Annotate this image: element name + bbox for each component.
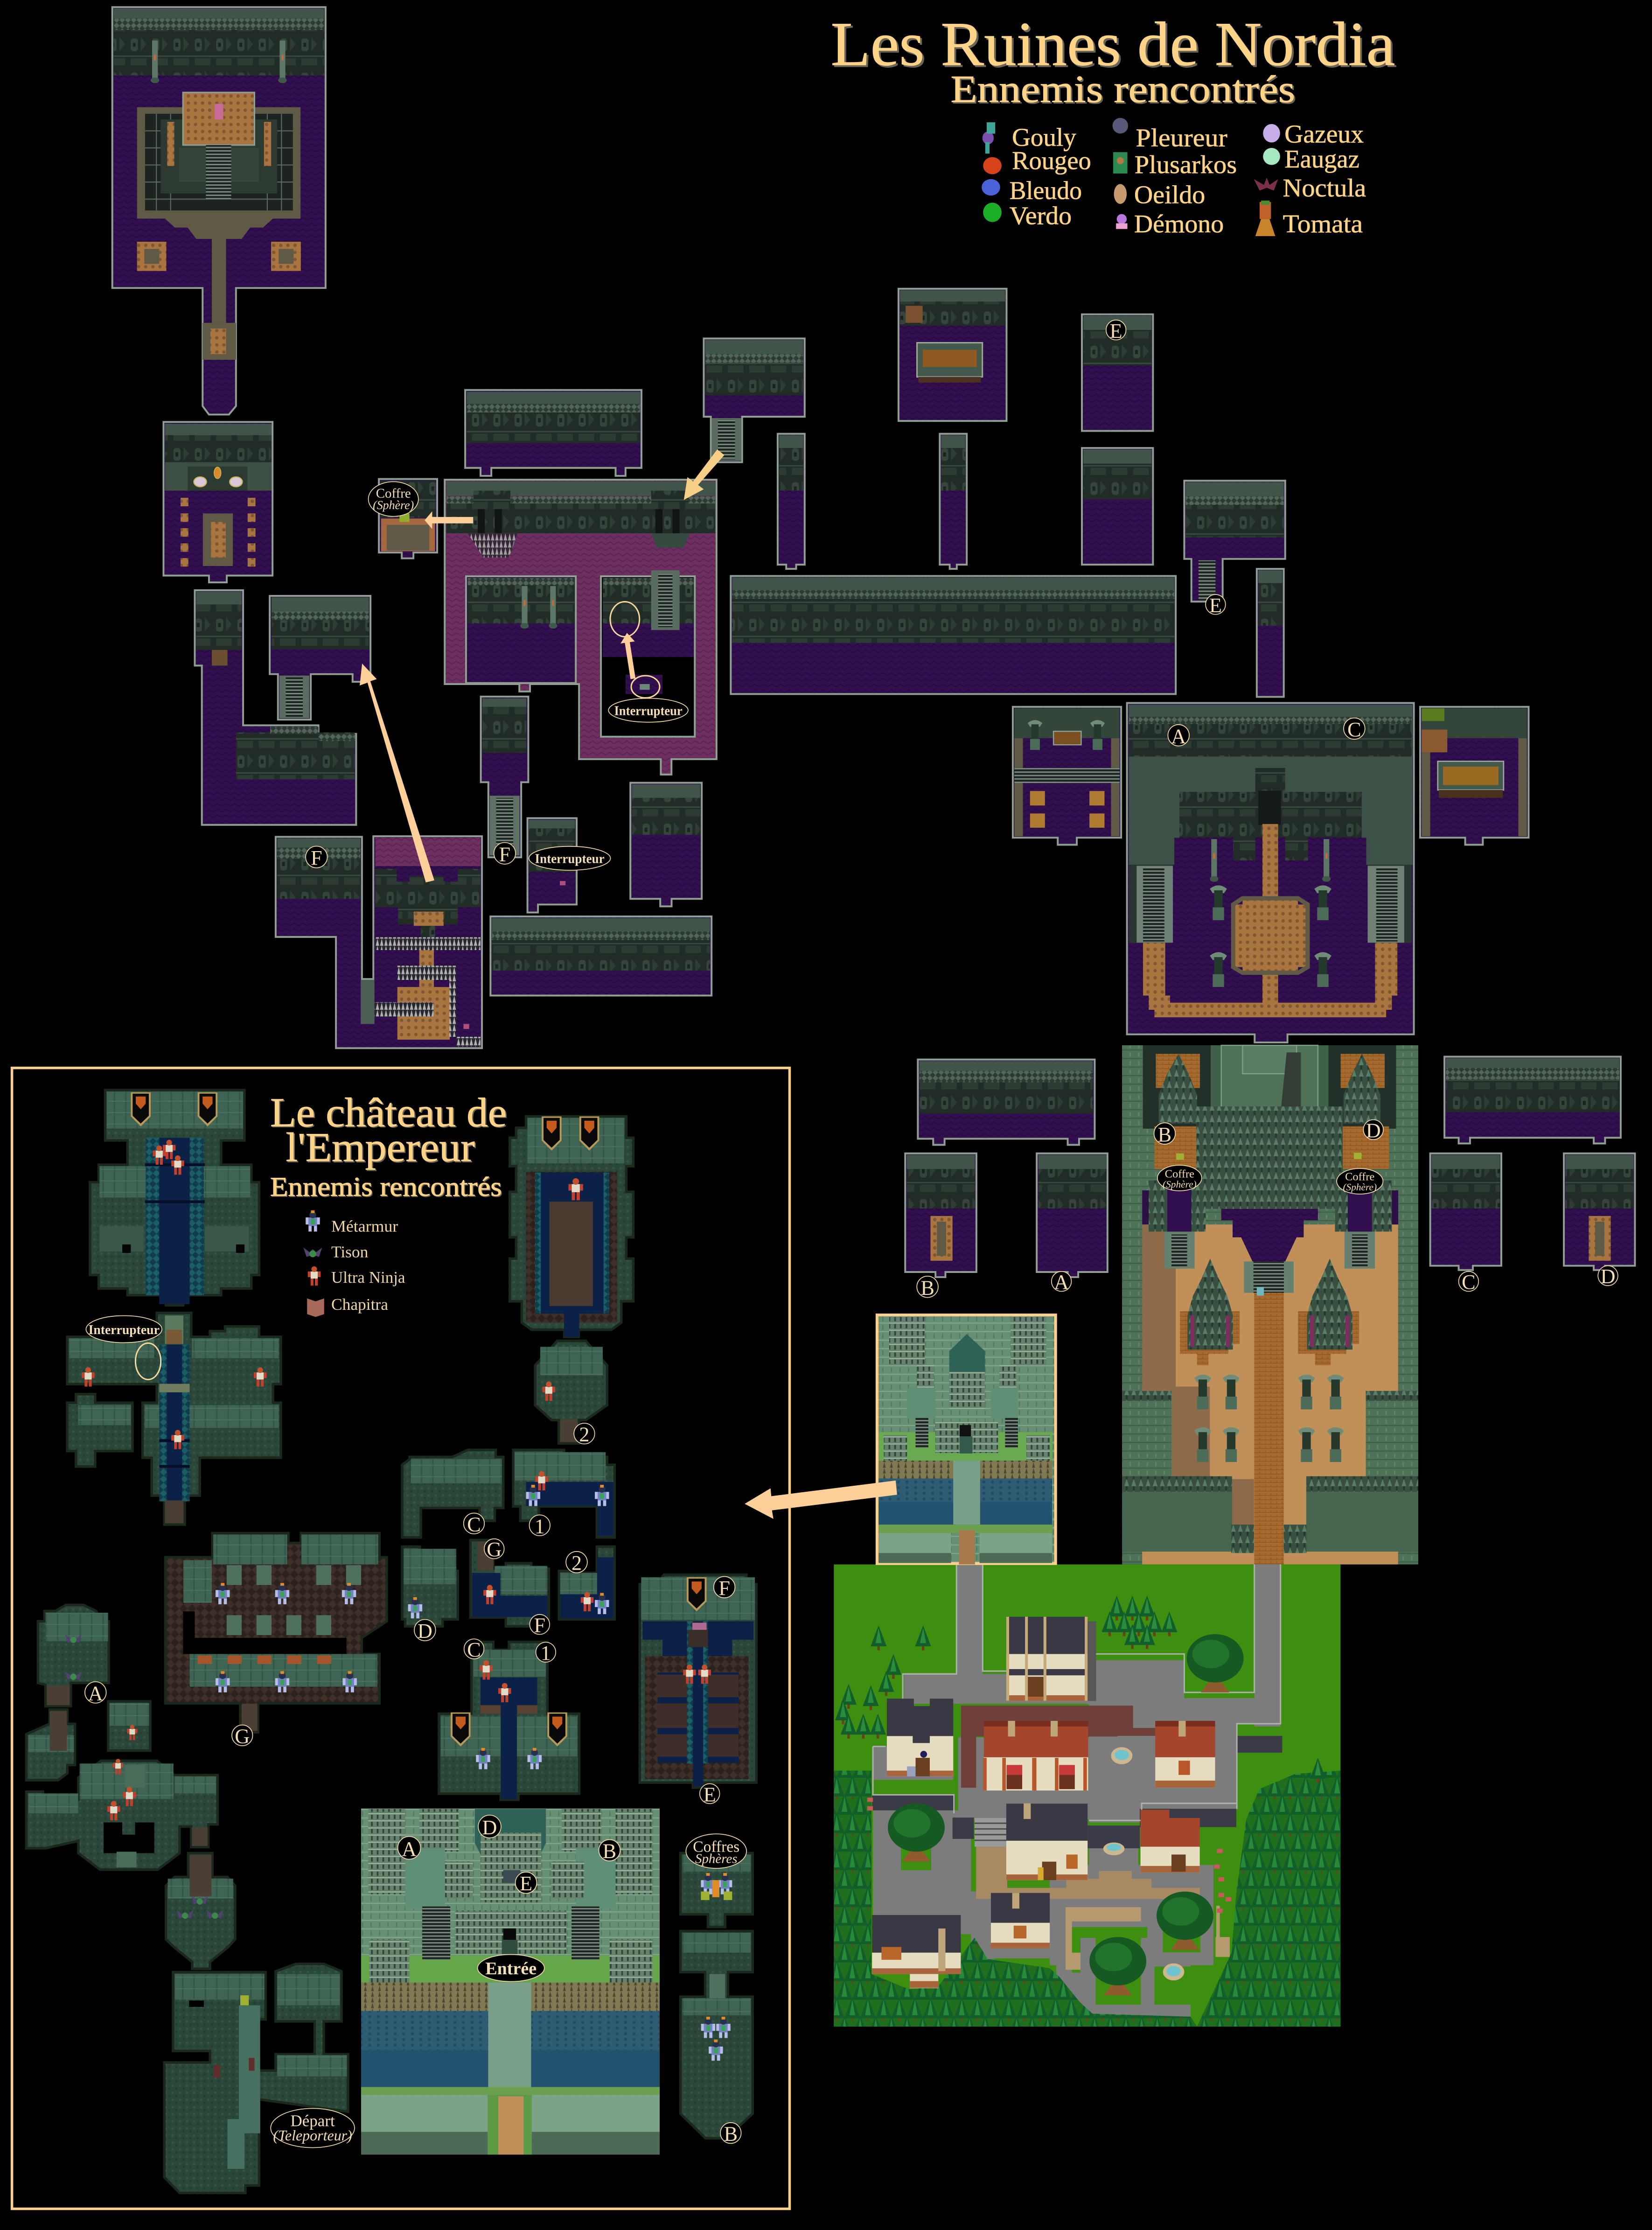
room: west corridor bbox=[195, 590, 356, 825]
map letter markers: A bbox=[88, 1682, 103, 1705]
room: upper room bbox=[465, 390, 641, 476]
room: right shop bbox=[1420, 707, 1528, 845]
label: Coffre Sphère: (Sphère) bbox=[373, 498, 414, 512]
map letter markers: 1 bbox=[535, 1515, 545, 1538]
room: G-F chamber bbox=[470, 1540, 549, 1626]
legend: castle enemies: Tison bbox=[331, 1243, 368, 1261]
room: central cavern bbox=[26, 1759, 217, 1870]
title: Les Ruines de Nordia bbox=[833, 12, 1397, 81]
label: Coffre right: Coffre bbox=[1345, 1171, 1374, 1183]
legend: Nordia enemies bbox=[982, 118, 1366, 238]
label: Interrupteur castle: Interrupteur bbox=[89, 1322, 160, 1337]
icon: Eaugaz bbox=[1263, 148, 1280, 165]
label: Entrée: Entrée bbox=[485, 1959, 537, 1978]
arrow: long arrow to upper west room bbox=[360, 664, 434, 882]
icon: Bleudo bbox=[982, 179, 1000, 196]
map letter markers: D bbox=[482, 1816, 497, 1839]
room: switch room bbox=[528, 818, 577, 912]
building: inn bbox=[887, 1699, 953, 1776]
map letter markers: A bbox=[402, 1838, 417, 1860]
label: Coffre Sphère: Coffre bbox=[376, 486, 411, 501]
building: red shops bbox=[983, 1721, 1088, 1790]
room: F stairs bbox=[481, 697, 528, 857]
room: eye room bbox=[163, 422, 272, 582]
room: west side cave bbox=[67, 1394, 132, 1467]
flowers bbox=[867, 1797, 1231, 1913]
room: B long room bbox=[680, 1931, 753, 2138]
room: cave with exit 2 bbox=[535, 1341, 607, 1443]
subheading: castle enemies: Ennemis rencontrés bbox=[270, 1172, 502, 1202]
legend: castle enemies: Métarmur bbox=[331, 1217, 398, 1235]
heading: Le château de l'Empereur: Le château de bbox=[270, 1090, 507, 1135]
highlight: switch circles bbox=[135, 602, 660, 1379]
pine clusters bbox=[835, 1596, 1326, 1783]
room: D chamber bbox=[402, 1547, 458, 1626]
label: Coffre left: (Sphère) bbox=[1163, 1179, 1197, 1190]
label: Entrée bbox=[478, 1955, 544, 1982]
subtitle: enemies encountered: Ennemis rencontrés bbox=[952, 70, 1297, 112]
room: E north bbox=[1082, 315, 1153, 431]
label: Départ Teleporteur: Départ bbox=[290, 2112, 335, 2130]
room: north antechamber east bbox=[1444, 1057, 1621, 1143]
icon: Tison bbox=[303, 1248, 322, 1257]
room: B cell bbox=[905, 1153, 976, 1277]
map letter markers: C bbox=[467, 1638, 481, 1661]
map letter markers bbox=[85, 320, 1618, 2146]
label: Interrupteur magenta bbox=[608, 698, 688, 722]
subtitle: enemies encountered: Ennemis rencontrés bbox=[950, 68, 1295, 111]
room: cave A bbox=[38, 1605, 109, 1706]
building: east red house bbox=[1155, 1721, 1215, 1788]
map letter markers: F bbox=[499, 843, 510, 866]
room: great hall bbox=[1127, 703, 1414, 1042]
map letter markers: G bbox=[235, 1725, 250, 1748]
room: magenta hall bbox=[445, 480, 717, 775]
oak trees bbox=[888, 1634, 1244, 1995]
road network bbox=[873, 1565, 1281, 2017]
room: stair nook bbox=[26, 1709, 75, 1780]
legend: Nordia enemies: Noctula bbox=[1283, 174, 1366, 202]
map letter markers: B bbox=[724, 2123, 738, 2146]
map letter markers: E bbox=[520, 1872, 532, 1895]
label: Coffres Sphères bbox=[686, 1834, 746, 1868]
label: Coffres Sphères: Sphères bbox=[695, 1852, 738, 1866]
stairs bbox=[975, 1818, 1006, 1847]
room: small north cell bbox=[108, 1701, 150, 1751]
icon: Gazeux bbox=[1263, 124, 1280, 142]
legend: Nordia enemies: Verdo bbox=[1010, 201, 1072, 230]
legend: Nordia enemies: Gouly bbox=[1012, 123, 1076, 151]
legend: castle enemies: Chapitra bbox=[331, 1295, 388, 1314]
room: corridor bbox=[778, 434, 805, 569]
label: Coffre Sphère bbox=[369, 482, 418, 517]
forests bbox=[834, 1771, 1340, 2027]
room: D cell bbox=[1564, 1153, 1635, 1270]
legend: Nordia enemies: Tomata bbox=[1283, 210, 1363, 238]
icon: Oeildo bbox=[1114, 184, 1127, 204]
map letter markers: G bbox=[487, 1538, 502, 1561]
legend: castle enemies bbox=[303, 1210, 405, 1317]
icon: Démono bbox=[1116, 214, 1128, 229]
building: south house bbox=[991, 1893, 1050, 1949]
map letter markers: C bbox=[1462, 1271, 1476, 1293]
legend: Nordia enemies: Pleureur bbox=[1136, 124, 1227, 152]
heading: Le château de l'Empereur: l'Empereur bbox=[287, 1125, 476, 1171]
label: Coffre left bbox=[1157, 1165, 1202, 1191]
room: chest room bbox=[379, 479, 437, 559]
label: Départ Teleporteur bbox=[271, 2108, 355, 2148]
map letter markers: F bbox=[718, 1577, 730, 1600]
legend: Nordia enemies: Plusarkos bbox=[1135, 150, 1237, 179]
room: south cell bbox=[630, 783, 702, 906]
icon: Rougeo bbox=[983, 157, 1002, 174]
label: Départ Teleporteur: (Teleporteur) bbox=[273, 2127, 352, 2144]
map letter markers: D bbox=[1601, 1265, 1615, 1288]
panel: Nordia castle exterior bbox=[1122, 1045, 1418, 1565]
legend: Nordia enemies: Gazeux bbox=[1284, 119, 1364, 148]
arrow: switch to pillars bbox=[620, 633, 635, 679]
room: corridor 2 bbox=[940, 434, 967, 569]
grass inserts bbox=[901, 1847, 1200, 2005]
map letter markers: F bbox=[311, 846, 322, 869]
label: Coffre right bbox=[1337, 1168, 1383, 1194]
room: north antechamber west bbox=[918, 1060, 1094, 1145]
icon: Tomata bbox=[1255, 201, 1275, 236]
map: emperor castle exterior bbox=[361, 1809, 660, 2154]
label: Coffre left: Coffre bbox=[1165, 1168, 1194, 1181]
room: emperor throne room bbox=[90, 1090, 259, 1305]
map letter markers: C bbox=[467, 1513, 481, 1536]
room: barracks bbox=[165, 1533, 387, 1732]
icon: Chapitra bbox=[307, 1299, 324, 1317]
legend: Nordia enemies: Démono bbox=[1134, 210, 1224, 238]
icon: Pleureur bbox=[1113, 118, 1128, 133]
room: shop north bbox=[899, 289, 1007, 421]
icon: Gouly bbox=[983, 122, 995, 154]
tan wall and plaza bbox=[976, 1847, 1230, 1970]
label: Interrupteur switch room bbox=[529, 846, 611, 870]
arrow: upper stairs to magenta hall bbox=[684, 449, 725, 500]
map letter markers: F bbox=[534, 1614, 545, 1637]
panel: framed castle preview bbox=[877, 1315, 1056, 1565]
room: east corridor bbox=[1257, 569, 1284, 697]
room: chamber 2 bbox=[559, 1547, 614, 1619]
icon: Noctula bbox=[1254, 178, 1278, 190]
building: southeast red house bbox=[1141, 1810, 1200, 1873]
map letter markers: E bbox=[1110, 320, 1122, 343]
arrow: castle preview to emperor castle bbox=[745, 1481, 897, 1519]
label: Interrupteur switch room: Interrupteur bbox=[535, 852, 605, 867]
map letter markers: 2 bbox=[572, 1552, 582, 1574]
arrow: to chest room bbox=[425, 511, 473, 529]
icon: Métarmur bbox=[306, 1210, 320, 1231]
room: A cell bbox=[1037, 1153, 1108, 1277]
building: southwest house bbox=[872, 1915, 961, 1988]
legend: Nordia enemies: Rougeo bbox=[1012, 146, 1091, 175]
legend: Nordia enemies: Bleudo bbox=[1010, 176, 1082, 205]
room: lower C-1 chamber bbox=[439, 1642, 579, 1800]
map letter markers: 1 bbox=[541, 1642, 551, 1664]
building: central hall bbox=[1006, 1804, 1087, 1880]
fences bbox=[873, 1565, 1281, 1820]
icon: Ultra Ninja bbox=[308, 1266, 321, 1286]
map letter markers: E bbox=[704, 1783, 716, 1806]
legend: Nordia enemies: Oeildo bbox=[1134, 181, 1205, 209]
map letter markers: D bbox=[1366, 1119, 1381, 1142]
map letter markers: E bbox=[1209, 594, 1222, 617]
title: Les Ruines de Nordia bbox=[831, 10, 1395, 79]
icon: Plusarkos bbox=[1113, 152, 1128, 174]
legend: Nordia enemies: Eaugaz bbox=[1284, 145, 1359, 173]
room: Tison stair room bbox=[166, 1853, 235, 1969]
legend: castle enemies: Ultra Ninja bbox=[331, 1268, 405, 1286]
brick street bbox=[961, 1706, 1155, 1788]
map letter markers: C bbox=[1347, 718, 1361, 741]
map letter markers: D bbox=[418, 1620, 432, 1643]
label: Interrupteur magenta: Interrupteur bbox=[614, 703, 683, 718]
room: upper stair room bbox=[704, 338, 805, 462]
room: south gallery bbox=[490, 916, 711, 995]
heading: Le château de l'Empereur bbox=[270, 1090, 508, 1171]
heading: Le château de l'Empereur: Le château de bbox=[271, 1091, 508, 1137]
room: switch chamber bbox=[67, 1313, 281, 1524]
room: west upper stair room bbox=[270, 596, 370, 720]
retaining walls bbox=[872, 1736, 1282, 1848]
room: banner hall E-F bbox=[640, 1575, 756, 1788]
room: F west bbox=[276, 836, 482, 1048]
map letter markers: A bbox=[1171, 725, 1186, 748]
room: C chamber bbox=[402, 1450, 503, 1538]
room: left shop bbox=[1013, 707, 1121, 845]
room: dining hall bbox=[510, 1117, 634, 1337]
label: Coffre right: (Sphère) bbox=[1343, 1181, 1377, 1193]
room: C cell bbox=[1430, 1153, 1501, 1270]
map letter markers: A bbox=[1054, 1271, 1069, 1293]
room: E stair room bbox=[1184, 481, 1285, 601]
icon: Verdo bbox=[983, 203, 1002, 222]
room: throne room bbox=[112, 7, 326, 414]
room: chamber 1 bbox=[513, 1450, 614, 1538]
map letter markers: B bbox=[603, 1840, 616, 1863]
room: starting vault bbox=[164, 1964, 348, 2193]
map letter markers: B bbox=[1158, 1123, 1171, 1146]
room: long gallery bbox=[731, 576, 1176, 694]
heading: Le château de l'Empereur: l'Empereur bbox=[286, 1125, 475, 1170]
panel: Le château de l'Empereur frame bbox=[12, 1068, 789, 2209]
fountains bbox=[1103, 1747, 1184, 1980]
room: lower E bbox=[1082, 448, 1153, 565]
label: Coffres Sphères: Coffres bbox=[693, 1838, 739, 1855]
map letter markers: B bbox=[920, 1276, 934, 1299]
room: Coffres room bbox=[680, 1853, 753, 1927]
panel: Ruines de Nordia dungeon rooms bbox=[112, 7, 1635, 1277]
building: north manor bbox=[1006, 1617, 1096, 1701]
map letter markers: 2 bbox=[579, 1423, 589, 1446]
subheading: castle enemies: Ennemis rencontrés bbox=[271, 1172, 503, 1202]
panel: Nordia town map bbox=[834, 1565, 1340, 2027]
label: Interrupteur castle bbox=[86, 1316, 162, 1342]
